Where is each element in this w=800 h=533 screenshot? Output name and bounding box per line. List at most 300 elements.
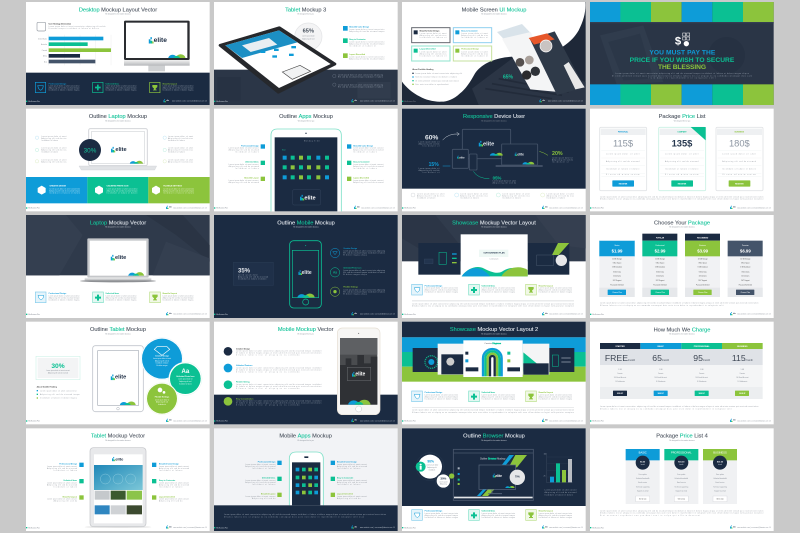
feature: unlimited ideas: Lorem ipsum dolor sit amet consectetur — [106, 294, 137, 297]
left list: Lorem ipsum dolor sit amet consect — [47, 481, 78, 484]
plan: business: Password Unlimited — [696, 283, 709, 286]
feature: professional design — [35, 292, 80, 303]
65% circle — [295, 23, 322, 50]
feature list: Ullamco laboris nisi ut aliquip ex ea commodo — [236, 354, 299, 357]
footer — [402, 206, 583, 210]
circle stat: 30%: 30% — [440, 477, 447, 481]
subtitle: We designed this for modern business — [105, 439, 131, 442]
feature: professional design — [412, 391, 458, 402]
right list: Incididunt ut labore — [159, 485, 182, 488]
column: professional: PROFESSIONAL — [694, 345, 710, 348]
dark feature band: Lorem ipsum dolor sit amet consectetur — [49, 85, 80, 88]
left list: Lorem ipsum dolor sit amet consect — [245, 479, 276, 482]
slide: Desktop Mockup Layout Vector — [26, 2, 210, 105]
plan: basic: BASIC — [639, 451, 647, 455]
phone outline: elite — [302, 270, 312, 276]
bar chart: Asia — [44, 60, 47, 63]
band text: Lorem ipsum dolor sit amet consectetur adipiscing — [338, 73, 383, 76]
laptop outline: elite — [115, 147, 127, 153]
feature list: Lorem ipsum dolor sit amet consectetur — [349, 40, 385, 43]
plan: business — [685, 234, 720, 297]
circle: creative design — [141, 338, 183, 380]
left list: Incididunt ut labore — [41, 151, 58, 154]
feature list: Elit sed do eiusmod tempor incididunt ut labore — [343, 252, 385, 255]
box: green — [453, 46, 492, 61]
plan: premium: $6.99 — [740, 249, 751, 254]
footer: www.website.com | username@domain.com 14 — [737, 206, 771, 209]
footer — [214, 206, 395, 210]
circle stat: 30% — [435, 473, 454, 489]
bottom four notes: Incididunt ut labore — [502, 196, 521, 199]
slide: Mobile Screen UI Mockup — [402, 2, 586, 105]
plan: business: Technical supporting — [713, 485, 727, 488]
far left slide — [413, 348, 439, 372]
price card: personal: Ut enim ad minim veniam — [606, 173, 640, 176]
plan: premium: Choose Plan — [741, 292, 750, 294]
feature list: Lorem ipsum dolor sit amet consectetur adipiscing elit sed do eiusmod tempor incididunt — [236, 366, 322, 369]
left list: Adipiscing elit sed do eius — [41, 149, 67, 152]
footer — [590, 312, 771, 316]
feature list: Ullamco laboris nisi ut aliquip ex ea commodo — [236, 370, 299, 373]
title: Responsive Device User — [463, 114, 525, 120]
circle: unlimited pents icon: Lorem ipsum dolor sit — [178, 378, 193, 381]
column: professional: 10 Subdomain — [697, 381, 707, 383]
plan: premium: 10 GB Storage — [740, 257, 750, 260]
footer: www.website.com | username@domain.com 14 — [173, 526, 207, 529]
plan: premium: 5 GB Database — [740, 266, 751, 269]
right list: Beautiful Color Design — [337, 461, 357, 464]
price card: personal: PERSONAL — [618, 130, 629, 133]
circle: flexible settings: Incididunt ut — [158, 403, 167, 406]
title: How Much We Charge — [654, 327, 710, 333]
bottom four notes: Adipiscing elit sed do eius — [502, 194, 530, 197]
paragraph — [412, 300, 574, 308]
feature list — [343, 26, 385, 60]
left list: Lorem ipsum dolor sit amet consect — [47, 498, 78, 501]
plan: premium: 24/7 Support — [741, 279, 750, 282]
35% box: 35% — [238, 268, 251, 274]
left list: Adipiscing elit sed do eiusmod — [245, 481, 275, 484]
feature list: Lorem ipsum dolor sit amet consectetur adipiscing — [343, 269, 385, 272]
tablet outline: Start — [282, 148, 286, 151]
plan: business: Choose Plan — [698, 292, 707, 294]
feature: professional design: Adipiscing elit sed do eiusmod tempor — [425, 395, 458, 398]
box: teal: Lorem ipsum dolor sit amet — [420, 50, 447, 53]
feature: professional design: Adipiscing elit sed do eiusmod tempor — [425, 514, 458, 517]
column: basic — [640, 343, 681, 396]
left list: Lorem ipsum dolor sit amet consect — [229, 147, 259, 150]
slide: Package Price List 4 — [590, 428, 774, 531]
subtitle: We designed this for you — [674, 119, 690, 122]
footer — [402, 525, 583, 529]
left list: Lorem ipsum dolor sit amet consect — [245, 495, 276, 498]
plan: basic: Email service — [638, 481, 647, 484]
right list: Adipiscing elit sed do eiusmod — [353, 181, 383, 184]
feature list: Elit sed do eiusmod tempor incididunt ut labore — [343, 290, 385, 293]
right list: Incididunt ut labore — [337, 483, 360, 486]
plan: starter: Online Data — [613, 270, 621, 273]
subtitle: We designed this for modern business — [481, 119, 507, 122]
feature: beautiful layout: Beautiful Layout — [163, 292, 177, 295]
footer: www.website.com | username@domain.com 14 — [737, 313, 771, 316]
feature list: Et dolore magna aliqua — [343, 273, 367, 276]
paragraph: Ullamco laboris nisi ut aliquip ex ea commodo consequat duis aute irure dolor in reprehenderit in voluptate velit esse cillum dolore eu fugiat nulla pariatur excepteur — [600, 198, 764, 201]
right list: Layout Diversified — [337, 493, 353, 496]
right list: Lorem ipsum dolor sit amet consect — [159, 481, 190, 484]
subtitle: We designed this for modern business — [105, 332, 131, 335]
panel: unlimited pents icon: Lorem ipsum dolor sit amet consectetur — [107, 187, 138, 190]
plan: professional: 10 GB Storage — [655, 257, 665, 260]
circle: creative design: Creative Design — [155, 354, 169, 357]
footer — [214, 525, 395, 529]
slide: Showcase Mockup Vector Layout 2 — [402, 322, 586, 424]
plan: premium: Online Data — [741, 270, 749, 273]
feature: unlimited ideas: Adipiscing elit sed do eiusmod tempor — [106, 296, 137, 299]
feature: beautiful layout: Incididunt ut labore et dolore magna — [163, 298, 193, 301]
feature: unlimited ideas: Lorem ipsum dolor sit amet consectetur — [482, 512, 516, 515]
plan: business: Get to now — [716, 498, 725, 501]
footer: Elite Business Plan — [216, 207, 228, 210]
price card: business: Lorem ipsum dolor sit amet — [722, 152, 756, 155]
feature: beautiful layout: Adipiscing elit sed do eiusmod tempor — [539, 395, 572, 398]
device logos — [457, 141, 534, 168]
left list: Beautiful Layout — [244, 177, 259, 180]
right list: Lorem ipsum dolor sit amet consect — [353, 163, 384, 166]
left list — [229, 144, 265, 184]
column: professional: 5 GB — [700, 369, 703, 371]
left list: Lorem ipsum dolor sit amet consect — [47, 465, 78, 468]
left list: Professional Design — [59, 464, 77, 466]
center mockup slide: Lorem ipsum — [490, 258, 499, 261]
paragraph: Ullamco laboris nisi ut aliquip ex ea commodo consequat duis aute irure dolor in reprehenderit in voluptate velit esse cillum dolore eu fugiat nulla pariatur excepteur — [600, 512, 764, 515]
price card: company — [659, 127, 706, 191]
feature: unlimited ideas: Adipiscing elit sed do eiusmod tempor — [482, 514, 516, 517]
footer: www.website.com | username@domain.com 14 — [360, 313, 395, 316]
footer: elite — [545, 525, 548, 528]
column: business — [722, 343, 763, 396]
feature: unlimited ideas — [469, 284, 516, 295]
phone mockup — [337, 328, 380, 415]
feature: unlimited ideas: Unlimited Ideas — [482, 391, 495, 394]
plan: premium: Office Space — [741, 263, 750, 265]
stat: 60%: 60% — [425, 135, 438, 142]
feature list: Et dolore magna aliqua — [343, 254, 367, 257]
column: starter: Domain — [617, 373, 623, 375]
bulleted list: About Subtitle Heading — [37, 385, 57, 388]
dark feature band — [26, 73, 210, 105]
feature: unlimited ideas: Incididunt ut labore et dolore magna — [482, 397, 515, 400]
30% box — [36, 356, 80, 380]
dark feature band: Incididunt ut labore et dolore magna — [163, 89, 193, 92]
devices — [452, 129, 543, 170]
circle: creative design: Adipiscing elit sed do — [155, 359, 169, 362]
subtitle: We designed this for modern business — [293, 226, 319, 229]
footer — [26, 312, 207, 316]
left list: Unlimited Ideas — [63, 479, 77, 482]
device logos: elite — [483, 141, 494, 147]
feature list: Easy Customization — [236, 397, 253, 400]
circle stat: 90% — [416, 453, 444, 481]
right list: Lorem ipsum dolor sit amet — [168, 135, 194, 138]
box: teal: Layout Diversified — [420, 48, 436, 51]
phone outline — [290, 241, 321, 308]
far right slide — [548, 348, 574, 372]
title: Package Price List — [659, 114, 706, 120]
plan: basic: Technical supporting — [636, 485, 650, 488]
footer: Elite Business Plan — [216, 100, 228, 103]
bar chart: Africa — [43, 55, 47, 58]
navy panel — [402, 109, 586, 189]
title: Mobile Apps Mockup — [279, 434, 332, 440]
plan: premium: Password Unlimited — [739, 283, 752, 286]
subtitle: We designed this for modern business — [669, 226, 695, 229]
slide: Outline Tablet Mockup — [26, 322, 210, 424]
title: Desktop Mockup Layout Vector — [79, 7, 157, 13]
footer: Elite Business Plan — [404, 313, 416, 316]
footer: elite — [166, 99, 169, 102]
left list: Adipiscing elit sed do eiusmod — [47, 467, 77, 470]
footer — [26, 525, 207, 529]
keyboard photo — [472, 59, 586, 105]
slide: Tablet Mockup Vector — [26, 428, 210, 531]
footer — [26, 99, 207, 103]
feature: beautiful layout — [526, 509, 572, 520]
left list — [35, 135, 67, 163]
price card: company: COMPANY — [677, 130, 687, 133]
feature: unlimited ideas: Adipiscing elit sed do eiusmod tempor — [482, 395, 516, 398]
feature: beautiful layout — [526, 284, 572, 295]
feature list: Layout Diversified — [349, 53, 365, 56]
left list: Beautiful Layout — [261, 493, 276, 496]
plan: starter: 10 GB Storage — [612, 257, 622, 260]
left list: Lorem ipsum dolor sit amet — [41, 135, 67, 138]
plan: premium: 10 Domains — [741, 276, 750, 278]
feature: beautiful layout: Beautiful Layout — [539, 391, 553, 394]
footer: elite — [545, 419, 548, 422]
feature: beautiful layout — [526, 391, 572, 402]
headline: PRICE IF YOU WISH TO SECURE — [630, 57, 735, 64]
tablet with website — [85, 448, 151, 528]
right list: Lorem ipsum dolor sit amet consect — [337, 495, 368, 498]
box: blue — [453, 28, 492, 43]
left list: Lorem ipsum dolor sit amet consect — [229, 179, 259, 182]
phone mockup: elite — [355, 372, 366, 378]
right list: Easy to Customize — [337, 477, 353, 480]
left list: Adipiscing elit sed do eiusmod — [245, 465, 275, 468]
feature list: Elit sed do eiusmod tempor incididunt ut labore — [343, 271, 385, 274]
footer: elite — [357, 206, 360, 209]
panel: flexible settings: Lorem ipsum dolor sit amet consectetur — [163, 187, 195, 190]
circle stat: 30%: Lorem ipsum — [439, 481, 448, 484]
plan: business: Business — [699, 245, 706, 247]
right list — [152, 463, 190, 503]
circle stat: 90%: Adipiscing elit — [427, 466, 437, 469]
strategy heading: Lorem ipsum dolor sit amet consectetur adipiscing elit sed do — [49, 25, 105, 28]
left list: Adipiscing elit sed do — [252, 497, 275, 500]
feature: professional design: Incididunt ut labore et dolore magna — [425, 291, 458, 294]
stat: 20% — [539, 151, 573, 164]
plan: professional: PROFESSIONAL — [671, 451, 692, 455]
paragraph: Lorem ipsum dolor sit amet consectetur adipiscing elit sed do eiusmod tempor incididunt ut labore et dolore magna aliqua ut enim ad minim veniam quis nostrud exercitation — [600, 509, 763, 512]
left list: Incididunt ut labore — [54, 485, 77, 488]
footer: elite — [169, 419, 172, 422]
laptop outline — [79, 129, 157, 170]
plan: starter: 24/7 Support — [613, 279, 622, 282]
stat: 05%: Adipiscing elit sed do — [493, 182, 516, 185]
feature list: Creative Design — [343, 247, 357, 250]
30% box: 30% — [51, 363, 65, 370]
body text — [612, 72, 752, 80]
dark feature band: Unlimited Ideas — [106, 82, 119, 85]
feature: beautiful layout: Lorem ipsum dolor sit amet consectetur — [163, 294, 194, 297]
plan: business — [703, 449, 737, 504]
right list: Beautiful Color Design — [159, 463, 179, 466]
laptop — [80, 238, 156, 282]
right list: Incididunt ut labore — [353, 167, 377, 170]
plan: business: 24/7 Support — [698, 279, 708, 282]
laptop: elite — [115, 255, 126, 261]
tablet outline: elite — [115, 375, 126, 381]
plan: starter: Choose Plan — [612, 292, 622, 294]
plan: professional: Choose Plan — [655, 292, 665, 294]
slide: Showcase Mockup Vector Layout — [402, 215, 586, 318]
right list: Lorem ipsum dolor sit amet consect — [353, 147, 384, 150]
footer — [402, 312, 583, 316]
center slide — [463, 340, 523, 377]
column: professional: 100 Email Account — [695, 376, 708, 379]
slide: Outline Browser Mockup — [402, 428, 586, 531]
stat: 60%: Incididunt ut — [423, 144, 440, 147]
plan: basic: Free update — [639, 473, 647, 476]
footer: Elite Business Plan — [404, 526, 416, 529]
feature: beautiful layout: Incididunt ut labore et dolore magna — [539, 516, 572, 519]
bottom four notes: Lorem ipsum dolor sit amet — [547, 192, 575, 195]
footer: elite — [169, 525, 172, 528]
footer: www.website.com | username@domain.com 14 — [360, 526, 395, 529]
tablet outline — [93, 346, 143, 412]
plan: business: Free update — [716, 473, 724, 476]
title: Outline Tablet Mockup — [90, 327, 146, 333]
right list — [163, 135, 194, 163]
bottom colour band — [590, 84, 774, 105]
price card: personal: 115$ — [613, 139, 634, 149]
feature: professional design: Lorem ipsum dolor sit amet consectetur — [425, 393, 459, 396]
bulleted list: About Portfolio Heading — [412, 68, 433, 71]
feature: unlimited ideas: Lorem ipsum dolor sit amet consectetur — [482, 287, 516, 290]
price card: company: Ut enim ad minim veniam — [665, 173, 699, 176]
center mockup slide — [461, 234, 528, 276]
price card: business: Incididunt ut labore et dolore — [722, 168, 756, 171]
right list: Adipiscing elit sed do eiusmod — [337, 481, 367, 484]
right list: Incididunt ut labore — [337, 467, 360, 470]
left list: Professional Design — [258, 462, 275, 464]
desktop monitor mockup: elite — [154, 37, 167, 44]
feature: beautiful layout: Beautiful Layout — [539, 284, 553, 287]
bulleted list: Adipiscing elit sed do eiusmod tempor — [40, 393, 81, 396]
subtitle: We designed this for modern business — [481, 13, 507, 16]
feature list: Lorem ipsum dolor sit amet consectetur adipiscing — [343, 288, 385, 291]
headline: YOU MUST PAY THE — [649, 50, 716, 57]
footer: elite — [169, 206, 172, 209]
logo box: elite — [304, 195, 316, 201]
box: teal — [412, 46, 450, 61]
footer: www.website.com | username@domain.com 14 — [737, 419, 771, 422]
headline — [630, 50, 735, 71]
feature list: Ut labore et dolore magna aliqua ut enim ad minim veniam quis nostrud exercitation — [236, 402, 321, 405]
plan: business: 10 GB Storage — [698, 257, 708, 260]
pricing table background — [600, 349, 763, 399]
slide: Mobile Mockup Vector — [214, 322, 398, 424]
feature list: Unlimited Features — [236, 364, 252, 367]
tablet with website: elite — [115, 456, 124, 461]
column: basic: BASIC — [658, 345, 664, 348]
30% box: Adipiscing elit sed do eiusmod — [48, 371, 68, 374]
subtitle: We designed this for you — [297, 439, 314, 442]
desktop monitor mockup — [124, 21, 190, 71]
bulleted list: Ut enim ad minim veniam quis nostrud exercitation — [415, 79, 459, 82]
chart caption: Adipiscing elit sed do eiusmod — [545, 491, 576, 494]
circle: unlimited pents icon: Unlimited Pents Icon — [176, 375, 194, 378]
panel: unlimited pents icon: Incididunt ut labore et dolore — [107, 191, 137, 194]
plan: professional: Professional — [655, 245, 665, 247]
right list: Adipiscing elit sed do — [159, 500, 182, 503]
title: Mobile Mockup Vector — [278, 327, 334, 333]
slide: Choose Your Package — [590, 215, 774, 318]
feature: unlimited ideas: Adipiscing elit sed do eiusmod tempor — [482, 289, 516, 292]
icon: dollar and chart — [675, 33, 690, 48]
right list: Easy to Customize — [353, 161, 370, 164]
feature: unlimited ideas — [93, 292, 137, 303]
feature list — [224, 347, 322, 407]
footer: www.website.com | username@domain.com 14 — [173, 419, 207, 422]
feature: beautiful layout — [150, 292, 194, 303]
band text: Elit sed do eiusmod tempor incididunt ut labore — [338, 85, 383, 88]
subtitle: We designed this for you — [298, 119, 314, 122]
dark feature band: Lorem ipsum dolor sit amet consectetur — [163, 85, 194, 88]
right list: Easy to Customize — [159, 479, 175, 482]
column: starter: 5 GB — [618, 369, 622, 371]
plan: professional: Password Unlimited — [653, 283, 667, 286]
panel: creative design: Adipiscing elit sed do eiusmod tempor — [49, 189, 81, 192]
panel: flexible settings — [148, 177, 210, 203]
panel: creative design: CREATIVE DESIGN — [49, 185, 67, 188]
feature list: Beautiful Color Design — [349, 26, 369, 29]
tablet outline: Monday 8:00 — [304, 140, 320, 142]
footer: elite — [545, 312, 548, 315]
column: starter: STARTER — [615, 345, 625, 348]
footer: www.website.com | username@domain.com 14 — [549, 313, 583, 316]
plan: business: $15.00 — [717, 462, 724, 464]
browser outline: elite — [495, 474, 502, 478]
footer — [214, 312, 395, 316]
footer: Elite Business Plan — [592, 207, 604, 210]
bulleted list: Lorem ipsum dolor sit amet consectetur — [40, 389, 77, 392]
strategy heading: Eiusmod tempor incididunt ut labore et dolore — [49, 27, 99, 30]
subtitle: We designed this for you — [297, 332, 314, 335]
paragraph: Lorem ipsum dolor sit amet consectetur adipiscing elit sed do eiusmod tempor incididunt ut labore et dolore magna aliqua ut enim ad minim veniam quis nostrud exercitation — [412, 409, 574, 412]
column: business: Domain — [740, 373, 745, 375]
box: teal: Adipiscing elit sed do eius — [420, 52, 447, 55]
feature: professional design: Professional Design — [425, 510, 442, 512]
35% box: Lorem ipsum dolor — [238, 273, 258, 276]
feature: professional design — [412, 510, 458, 520]
column: professional — [681, 343, 722, 396]
bar chart: 25 — [544, 476, 546, 478]
browser outline: Outline Browser Mockup — [480, 457, 506, 460]
left list: Incididunt ut labore — [54, 469, 77, 472]
column: starter — [600, 343, 640, 396]
band text: Lorem ipsum dolor sit amet consectetur adipiscing — [338, 83, 383, 86]
